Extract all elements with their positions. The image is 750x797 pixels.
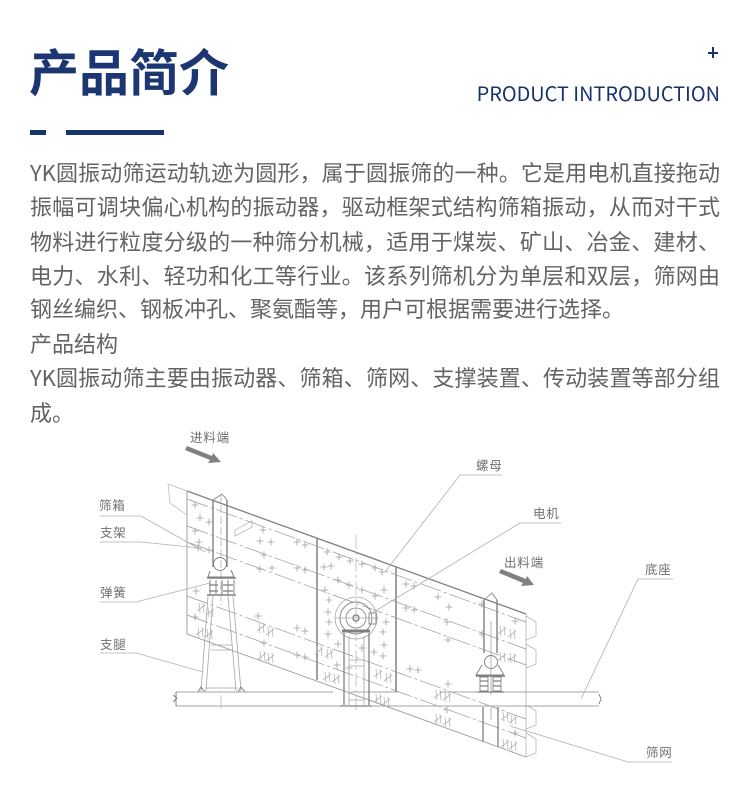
label: 弹簧 — [100, 582, 210, 602]
motor and centre support — [335, 535, 378, 713]
label: 筛箱: 筛箱 — [99, 495, 126, 514]
body text: 产品结构 — [30, 327, 118, 359]
label: 弹簧: 弹簧 — [100, 582, 127, 601]
body text: 振幅可调块偏心机构的振动器，驱动框架式结构筛箱振动，从而对干式 — [30, 190, 720, 222]
slanted perforation marks — [196, 603, 517, 751]
label: 筛箱 — [99, 495, 205, 552]
label: 电机 — [372, 503, 561, 613]
label: 螺母: 螺母 — [476, 455, 503, 474]
body text: 成。 — [30, 396, 74, 428]
label: 筛网: 筛网 — [646, 742, 673, 761]
label: 电机: 电机 — [533, 503, 560, 522]
screen box frame — [168, 484, 536, 757]
left support leg and spring — [198, 494, 245, 709]
subtitle: PRODUCT INTRODUCTION — [477, 78, 720, 107]
body text: 电力、水利、轻功和化工等行业。该系列筛机分为单层和双层，筛网由 — [30, 259, 720, 291]
label: 进料端 with arrow: 进料端 — [190, 427, 230, 446]
label: 支架: 支架 — [100, 522, 127, 541]
label: 螺母 — [385, 455, 503, 572]
right support and spring — [476, 593, 505, 747]
plus icon — [708, 47, 718, 58]
base beam — [173, 692, 601, 706]
label: 支腿: 支腿 — [100, 634, 127, 653]
label: 支腿 — [100, 634, 203, 672]
label: 底座: 底座 — [645, 559, 672, 578]
body text: 钢丝编织、钢板冲孔、聚氨酯等，用户可根据需要进行选择。 — [30, 292, 624, 324]
label: 筛网 — [510, 726, 673, 762]
label: 出料端 with arrow: 出料端 — [504, 552, 544, 571]
body text — [30, 156, 720, 428]
accent bar long — [66, 130, 164, 135]
label: 底座 — [581, 559, 673, 699]
title: 产品简介 — [29, 34, 229, 106]
body text: YK圆振动筛运动轨迹为圆形，属于圆振筛的一种。它是用电机直接拖动 — [30, 156, 720, 188]
body text: YK圆振动筛主要由振动器、筛箱、筛网、支撑装置、传动装置等部分组 — [30, 361, 720, 393]
label: 支架 — [100, 522, 200, 548]
label: 进料端 with arrow — [185, 427, 230, 463]
accent bar short — [30, 130, 46, 135]
body text: 物料进行粒度分级的一种筛分机械，适用于煤炭、矿山、冶金、建材、 — [30, 225, 720, 257]
label: 出料端 with arrow — [499, 552, 544, 586]
perforation marks — [192, 502, 518, 736]
